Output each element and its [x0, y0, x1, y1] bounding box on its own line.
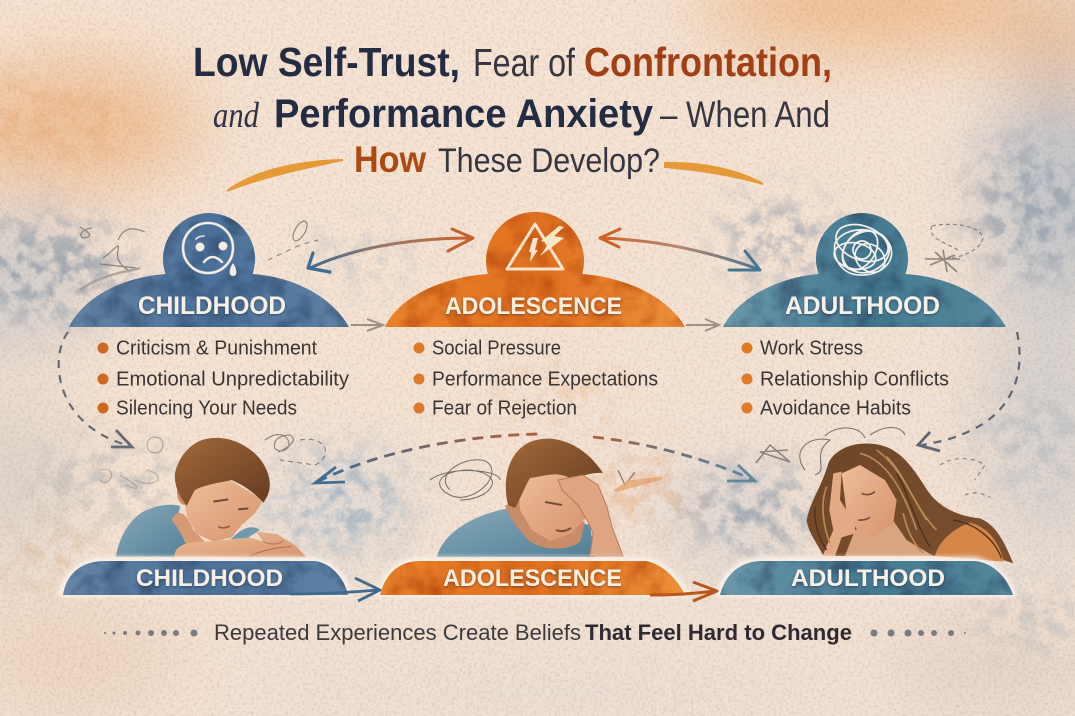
adulthood header dome with icon: ADULTHOOD: [785, 292, 940, 320]
panel: adolescence: [385, 212, 685, 420]
childhood list: [98, 338, 349, 420]
title: Low Self-Trust,: [193, 39, 460, 85]
adulthood list: Avoidance Habits: [760, 398, 911, 420]
swoosh underlines: [227, 160, 763, 191]
arrow: dashed left curve: [59, 332, 132, 447]
title: – When And: [660, 94, 830, 135]
footer message: [104, 620, 966, 645]
arrow: banner childhood to adolescence: [290, 578, 380, 601]
panel: childhood: [69, 213, 349, 420]
adolescence list: Fear of Rejection: [432, 398, 577, 420]
panel: adulthood: [723, 213, 1006, 420]
illustration: stressed teen: [437, 439, 623, 557]
adolescence header dome with icon: [385, 212, 685, 327]
arrow: small arrow adolescence to adulthood: [686, 319, 719, 331]
adolescence header dome with icon: ADOLESCENCE: [445, 293, 622, 320]
childhood header dome with icon: CHILDHOOD: [138, 292, 286, 320]
icon: sad face: [183, 223, 236, 276]
illustration: sad boy: [116, 438, 307, 557]
arrow: small arrow childhood to adolescence: [351, 319, 383, 331]
arrow: dashed right curve: [918, 332, 1020, 451]
title: Confrontation,: [584, 39, 832, 85]
childhood list: Silencing Your Needs: [116, 398, 297, 420]
bottom banner: adolescence: ADOLESCENCE: [443, 565, 622, 592]
bottom banner: adulthood: ADULTHOOD: [791, 565, 945, 592]
icon: tangled scribble: [831, 218, 896, 280]
arrow: dashed center right: [593, 437, 755, 481]
footer dots: [104, 630, 966, 636]
adolescence list: Social Pressure: [432, 338, 561, 360]
icon: warning triangle with lightning: [507, 224, 564, 269]
adulthood header dome with icon: [723, 213, 1006, 327]
childhood list: Criticism & Punishment: [116, 338, 317, 360]
illustration: exhausted woman: [807, 444, 1013, 563]
adulthood list: [742, 338, 949, 420]
footer message: Repeated Experiences Create Beliefs: [214, 620, 581, 645]
arrow: banner adolescence to adulthood: [650, 582, 717, 601]
scribbles: [80, 219, 990, 500]
arrow: childhood and adolescence double arrow: [308, 229, 473, 272]
title: These Develop?: [438, 142, 660, 180]
childhood header dome with icon: [69, 213, 349, 327]
title: Performance Anxiety: [274, 92, 654, 136]
bottom banner: childhood: [58, 557, 353, 597]
adulthood list: Work Stress: [760, 338, 863, 360]
adulthood list: Relationship Conflicts: [760, 368, 949, 390]
title: [193, 39, 832, 180]
arrow: adolescence and adulthood double arrow: [600, 229, 760, 270]
bottom banner: adolescence: [375, 557, 690, 597]
bottom banner: childhood: CHILDHOOD: [136, 565, 283, 592]
title: Fear of: [473, 42, 575, 85]
adolescence list: [414, 338, 658, 420]
arrow: dashed center left: [315, 434, 540, 483]
title: How: [354, 139, 426, 180]
footer message: That Feel Hard to Change: [585, 620, 852, 645]
bottom banner: adulthood: [715, 557, 1018, 597]
childhood list: Emotional Unpredictability: [116, 368, 349, 390]
adolescence list: Performance Expectations: [432, 368, 658, 390]
title: and: [213, 95, 260, 135]
